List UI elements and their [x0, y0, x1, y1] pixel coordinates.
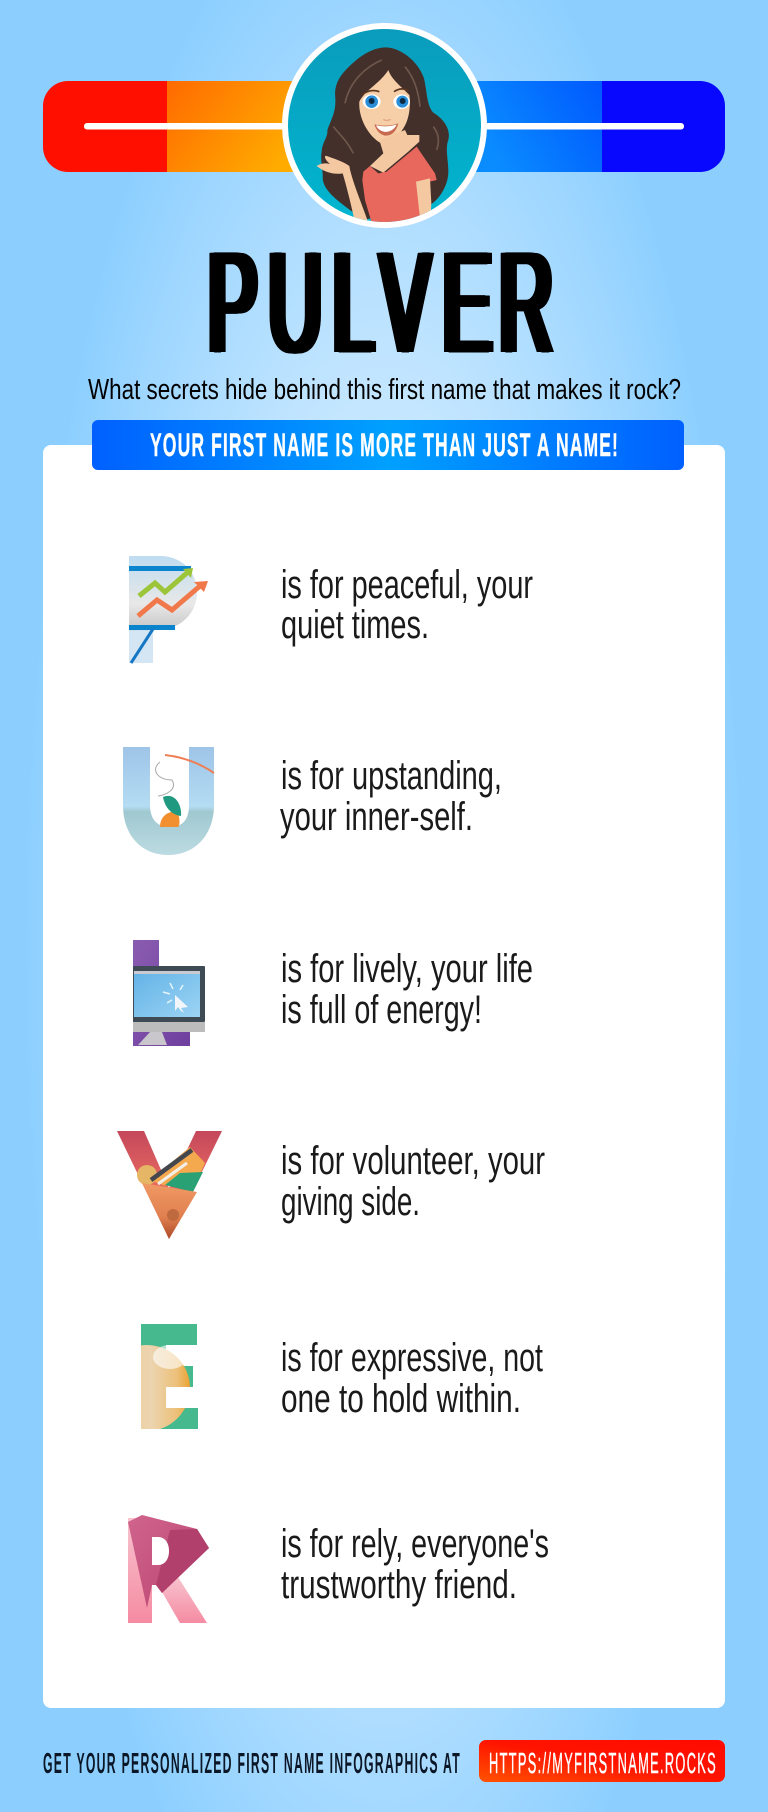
- avatar mouth: [374, 123, 398, 136]
- banner: [92, 420, 684, 470]
- row 1 text: is for peaceful, your: [281, 563, 533, 607]
- avatar teeth: [376, 125, 397, 132]
- row 4 text: is for volunteer, your: [281, 1139, 545, 1183]
- row 2 text: is for upstanding,: [281, 754, 502, 798]
- row 6 text: [281, 1522, 549, 1607]
- row 5 text: [281, 1336, 543, 1421]
- row 2 text: your inner-self.: [280, 795, 473, 839]
- title: PULVER: [208, 222, 552, 383]
- avatar left arm and hand: [317, 156, 368, 223]
- icon: letter V with wallet: [117, 1131, 222, 1239]
- row 4 text: giving side.: [281, 1180, 420, 1224]
- avatar hair highlights: [333, 60, 438, 153]
- avatar nose: [383, 119, 391, 120]
- avatar eyes: [363, 94, 381, 109]
- avatar shirt: [362, 147, 437, 223]
- row 1 text: quiet times.: [281, 603, 429, 647]
- white content panel: [43, 445, 725, 1708]
- avatar neck and chest: [370, 130, 419, 173]
- avatar hair: [321, 47, 449, 220]
- icon: letter E with moon: [141, 1324, 198, 1429]
- avatar: woman portrait in circle: [282, 23, 487, 228]
- row 5 text: is for expressive, not: [281, 1336, 543, 1380]
- row 4 text: [281, 1139, 545, 1224]
- row 3 text: [281, 947, 533, 1032]
- row 1 text: [281, 563, 533, 647]
- avatar right arm: [416, 178, 431, 218]
- avatar face: [359, 70, 410, 144]
- row 6 text: trustworthy friend.: [281, 1563, 517, 1607]
- icon: letter R with gem: [128, 1515, 209, 1623]
- icon: letter U with fish: [123, 747, 214, 855]
- row 6 text: is for rely, everyone's: [281, 1522, 549, 1566]
- row 5 text: one to hold within.: [281, 1377, 521, 1421]
- row 3 text: is for lively, your life: [281, 947, 533, 991]
- footer url button: [479, 1740, 725, 1782]
- row 3 text: is full of energy!: [281, 988, 482, 1032]
- avatar brows: [362, 89, 408, 95]
- icon: letter P with chart: [129, 556, 208, 663]
- icon: letter L with monitor: [133, 940, 205, 1046]
- header colour bar: [43, 81, 725, 172]
- row 2 text: [280, 754, 502, 839]
